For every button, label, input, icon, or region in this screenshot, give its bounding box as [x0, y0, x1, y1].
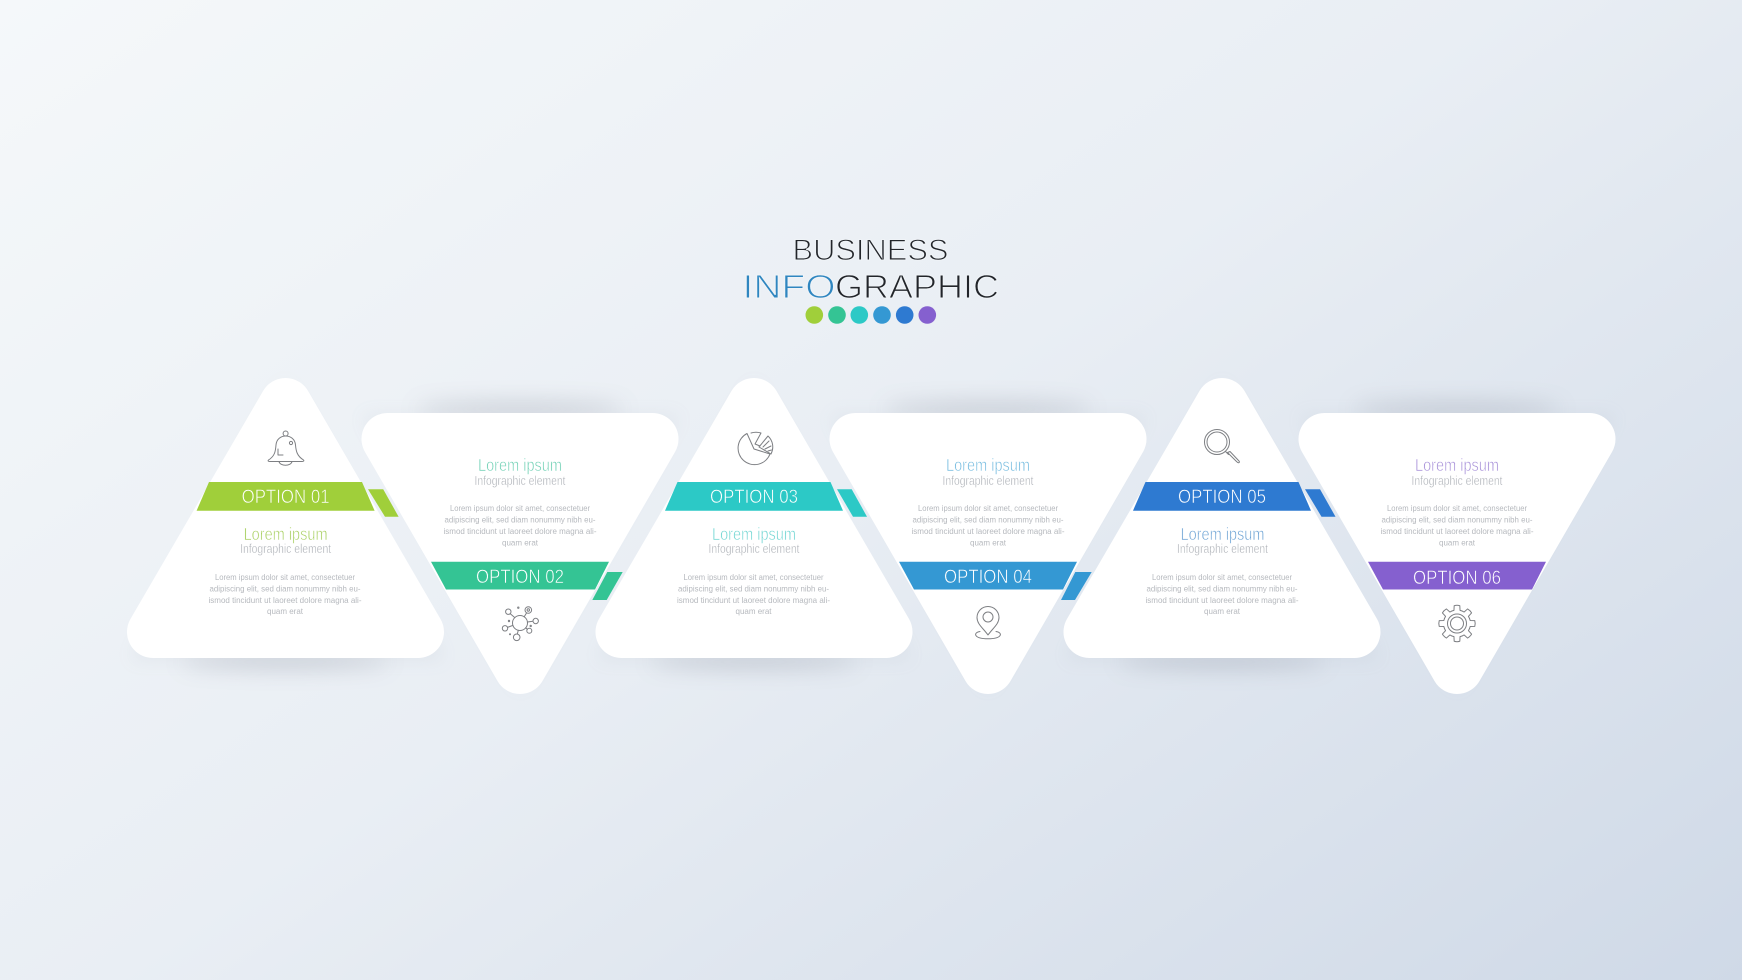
panel: option 04: Lorem ipsum	[946, 455, 1030, 475]
panel: option 05: OPTION 05	[1178, 486, 1266, 508]
panel: option 06: Lorem ipsum	[1415, 455, 1499, 475]
panel: option 02: quam erat	[502, 537, 539, 547]
panel: option 05: quam erat	[1204, 606, 1241, 616]
panel: option 03: Lorem ipsum	[712, 524, 796, 544]
panel: option 01: ismod tincidunt ut laoreet dolore magna ali-	[208, 595, 362, 605]
panel: option 02: adipiscing elit, sed diam nonummy nibh eu-	[444, 515, 596, 525]
panel: option 06	[1324, 439, 1590, 668]
panel: option 03: Lorem ipsum dolor sit amet, consectetuer	[684, 572, 824, 582]
panel: option 02: Lorem ipsum	[478, 455, 562, 475]
panel: option 04: adipiscing elit, sed diam nonummy nibh eu-	[912, 515, 1064, 525]
panel: option 05: ismod tincidunt ut laoreet dolore magna ali-	[1146, 595, 1299, 605]
panel: option 01: quam erat	[267, 606, 304, 616]
panel: option 01: adipiscing elit, sed diam nonummy nibh eu-	[210, 584, 361, 594]
panel: option 06: OPTION 06	[1413, 567, 1501, 589]
title: INFO	[742, 268, 836, 305]
icon: molecule network	[502, 607, 538, 641]
panel: option 02	[388, 439, 652, 668]
icon: magnifier	[1204, 430, 1239, 463]
icon: gear	[1439, 605, 1475, 642]
icon: pie chart	[738, 432, 773, 465]
icon: bell	[268, 431, 304, 465]
panel: option 03: ismod tincidunt ut laoreet dolore magna ali-	[677, 595, 830, 605]
panel: option 04: Lorem ipsum dolor sit amet, consectetuer	[918, 503, 1058, 513]
panel: option 04: quam erat	[970, 537, 1007, 547]
panel: option 02: OPTION 02	[476, 566, 564, 588]
panel: option 06: Lorem ipsum dolor sit amet, consectetuer	[1387, 503, 1527, 513]
panel: option 05: adipiscing elit, sed diam nonummy nibh eu-	[1146, 584, 1298, 594]
title: BUSINESS	[792, 234, 948, 267]
panel: option 03	[622, 404, 886, 632]
icon: map pin	[976, 606, 1000, 639]
panel: option 03: Infographic element	[708, 542, 800, 556]
panel: option 03: adipiscing elit, sed diam nonummy nibh eu-	[678, 584, 829, 594]
panel: option 05: Infographic element	[1177, 542, 1268, 556]
panel: option 06: Infographic element	[1412, 474, 1503, 488]
panel: option 04: Infographic element	[942, 474, 1034, 488]
panel: option 04	[856, 439, 1120, 668]
panel: option 06: adipiscing elit, sed diam nonummy nibh eu-	[1382, 515, 1533, 525]
panel: option 04: OPTION 04	[944, 566, 1032, 588]
panel: option 03: quam erat	[736, 606, 772, 616]
panel: option 02: Lorem ipsum dolor sit amet, consectetuer	[450, 503, 590, 513]
panel: option 06: quam erat	[1439, 537, 1476, 547]
panel: option 01: Infographic element	[240, 542, 332, 556]
panel: option 01: Lorem ipsum	[244, 524, 328, 544]
panel: option 02: ismod tincidunt ut laoreet dolore magna ali-	[444, 526, 597, 536]
panel: option 03: OPTION 03	[710, 486, 798, 508]
panel: option 05: Lorem ipsum dolor sit amet, consectetuer	[1152, 572, 1292, 582]
panel: option 01: Lorem ipsum dolor sit amet, consectetuer	[215, 572, 355, 582]
colored dots row	[806, 306, 936, 324]
title: GRAPHIC	[835, 268, 999, 305]
title	[742, 234, 999, 305]
panel: option 01: OPTION 01	[242, 486, 330, 508]
panel: option 01	[153, 404, 418, 632]
panel: option 05	[1090, 404, 1354, 632]
panel: option 02: Infographic element	[474, 474, 566, 488]
panel: option 06: ismod tincidunt ut laoreet dolore magna ali-	[1380, 526, 1534, 536]
panel: option 04: ismod tincidunt ut laoreet dolore magna ali-	[912, 526, 1065, 536]
panel: option 05: Lorem ipsum	[1180, 524, 1264, 544]
